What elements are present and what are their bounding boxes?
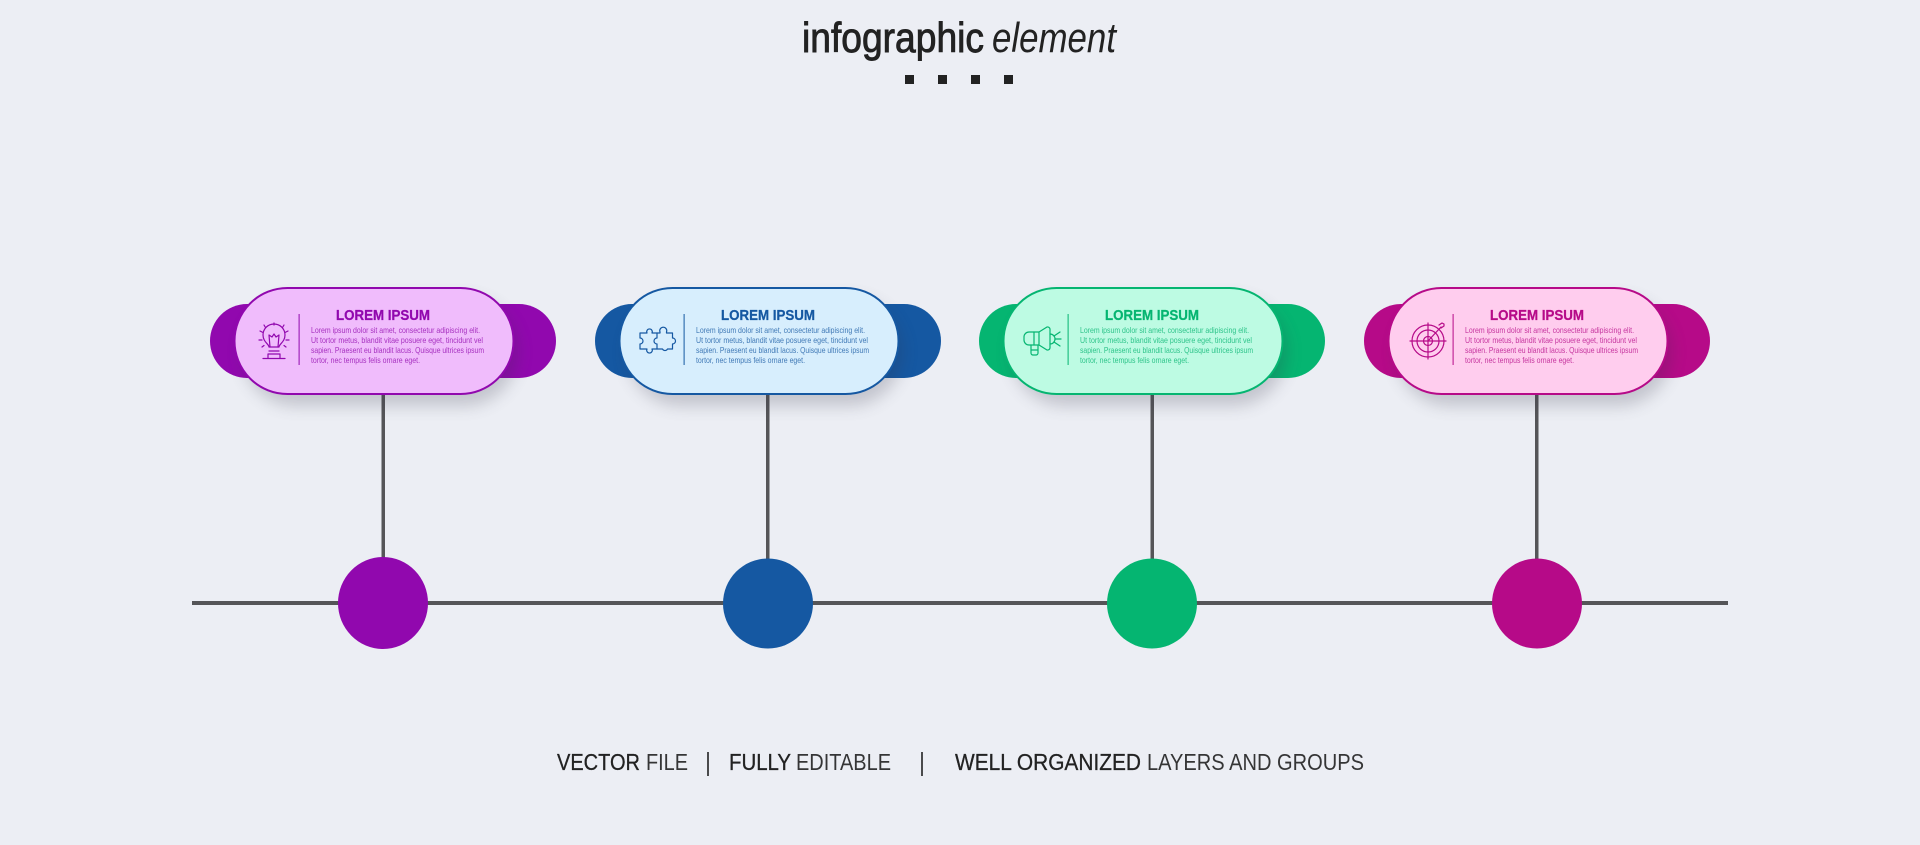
title dots [905,75,1013,84]
icon: target with arrow [1410,323,1446,359]
body text: sapien. Praesent eu blandit lacus. Quisque ultrices ipsum [1080,345,1253,355]
body text [1465,325,1638,365]
front pill [1004,288,1282,394]
icon: light bulb [259,323,289,358]
body text: Lorem ipsum dolor sit amet, consectetur adipiscing elit. [1465,325,1634,335]
front pill [620,288,898,394]
timeline node 1 [338,557,428,649]
pill shadow [1396,298,1672,406]
heading: LOREM IPSUM [1490,308,1584,324]
title: infographic [802,14,984,61]
body text: tortor, nec tempus felis ornare eget. [696,355,805,365]
connector 4 [1535,392,1538,560]
footer tagline: WELL ORGANIZED [955,749,1141,775]
heading: LOREM IPSUM [721,308,815,324]
divider [1453,314,1454,365]
title: element [992,14,1118,61]
body text [311,325,484,365]
panel: card 3 [979,288,1325,406]
icon: puzzle pieces [640,327,676,353]
back pill [210,304,556,378]
connector 3 [1150,392,1154,560]
timeline node 3 [1107,558,1197,648]
footer tagline [557,749,1364,776]
footer tagline: VECTOR [557,749,640,775]
divider [1068,314,1069,365]
body text: Lorem ipsum dolor sit amet, consectetur adipiscing elit. [696,325,865,335]
pill shadow [242,298,518,406]
body text: tortor, nec tempus felis ornare eget. [311,355,420,365]
divider [299,314,300,365]
connector 2 [766,392,770,560]
divider [684,314,685,365]
pill shadow [1011,298,1287,406]
front pill [234,288,514,394]
body text: Lorem ipsum dolor sit amet, consectetur adipiscing elit. [311,325,480,335]
footer tagline: EDITABLE [796,749,891,775]
back pill [595,304,941,378]
title [802,14,1118,61]
body text [696,325,869,365]
body text: Ut tortor metus, blandit vitae posuere eget, tincidunt vel [696,335,868,345]
heading: LOREM IPSUM [336,308,430,324]
footer tagline: FULLY [729,749,791,775]
body text: tortor, nec tempus felis ornare eget. [1080,355,1189,365]
connector 1 [382,392,385,560]
icon: megaphone [1024,327,1061,355]
panel: card 4 [1364,288,1710,406]
body text: sapien. Praesent eu blandit lacus. Quisque ultrices ipsum [696,345,869,355]
timeline node 2 [723,558,813,648]
footer tagline: LAYERS AND GROUPS [1147,749,1364,775]
footer tagline: FILE [646,749,688,775]
body text [1080,325,1253,365]
panel: card 2 [595,288,941,406]
body text: Ut tortor metus, blandit vitae posuere eget, tincidunt vel [311,335,483,345]
back pill [979,304,1325,378]
back pill [1364,304,1710,378]
body text: sapien. Praesent eu blandit lacus. Quisque ultrices ipsum [1465,345,1638,355]
body text: Lorem ipsum dolor sit amet, consectetur adipiscing elit. [1080,325,1249,335]
heading: LOREM IPSUM [1105,308,1199,324]
front pill [1388,288,1668,394]
body text: Ut tortor metus, blandit vitae posuere eget, tincidunt vel [1465,335,1637,345]
timeline node 4 [1492,558,1582,648]
body text: tortor, nec tempus felis ornare eget. [1465,355,1574,365]
body text: Ut tortor metus, blandit vitae posuere eget, tincidunt vel [1080,335,1252,345]
timeline axis [192,601,1728,605]
panel: card 1 [210,288,556,406]
body text: sapien. Praesent eu blandit lacus. Quisque ultrices ipsum [311,345,484,355]
pill shadow [627,298,903,406]
